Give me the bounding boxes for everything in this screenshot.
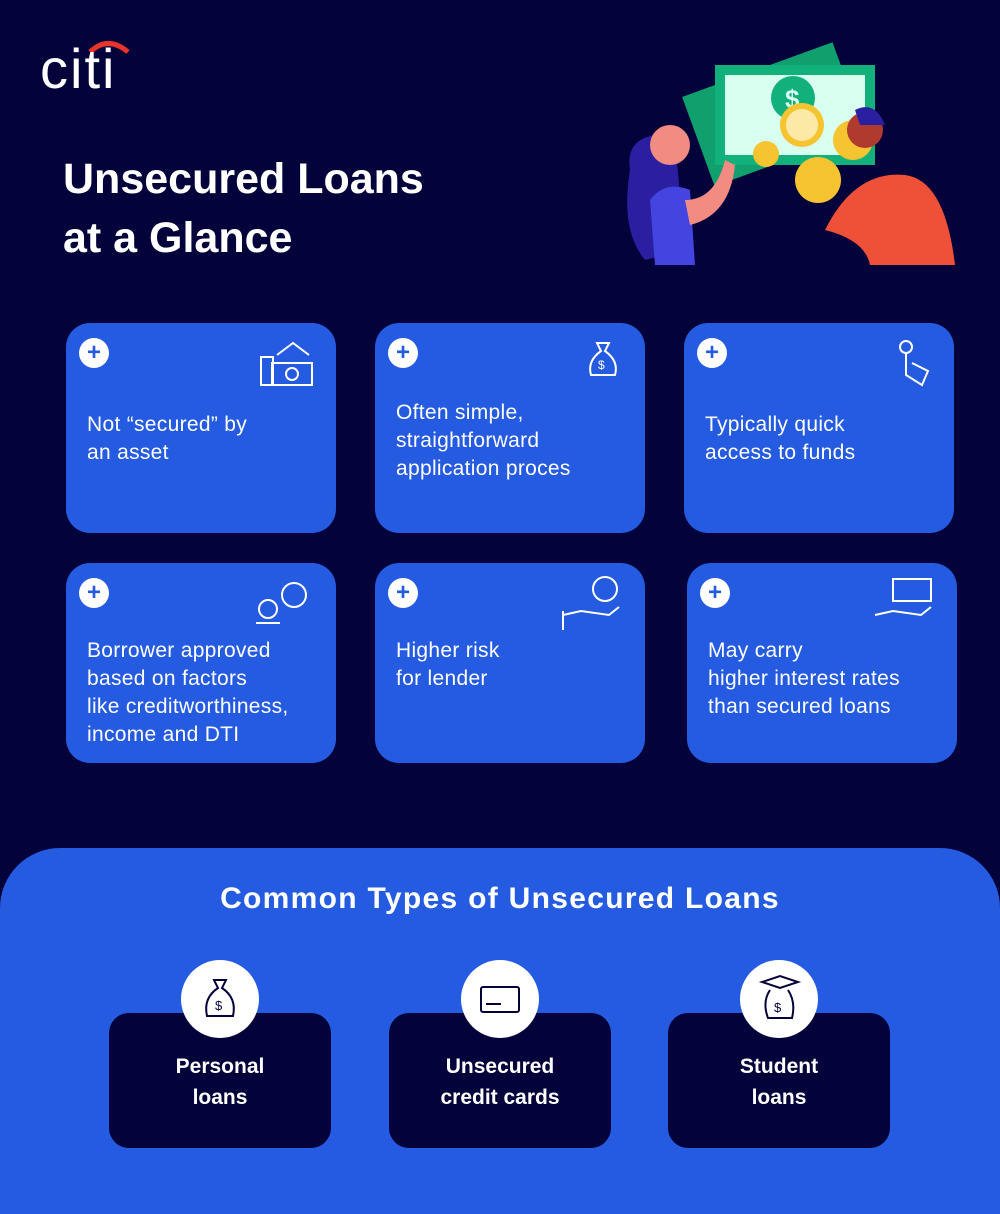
card 5: + [396, 579, 410, 606]
card 6: + [708, 579, 722, 606]
icon: money bag [589, 342, 617, 376]
card 1: + [87, 339, 101, 366]
type: personal loans [109, 1013, 331, 1148]
card 2: application proces [396, 457, 571, 480]
icon: bag: $ [215, 998, 223, 1013]
card 3 [684, 323, 954, 533]
card 3: access to funds [705, 441, 855, 464]
title: Unsecured Loans [63, 155, 424, 203]
type: personal loans: Personal [176, 1055, 264, 1078]
icon: house money [260, 342, 313, 386]
card 5 [375, 563, 645, 763]
card 4 [66, 563, 336, 763]
icon: hand cash [874, 578, 932, 616]
card 6: higher interest rates [708, 667, 900, 690]
icon: person coin [256, 582, 307, 624]
type: personal loans: loans [193, 1086, 247, 1109]
card 2: + [396, 339, 410, 366]
title: at a Glance [63, 214, 292, 262]
card 2: Often simple, [396, 401, 524, 424]
icon: bag [181, 960, 259, 1038]
card 4: income and DTI [87, 723, 239, 746]
bottom panel: common types [0, 848, 1000, 1214]
card 4: + [87, 579, 101, 606]
type: student loans [668, 1013, 890, 1148]
card 3: Typically quick [705, 413, 845, 436]
card 4: Borrower approved [87, 639, 271, 662]
card 2: straightforward [396, 429, 539, 452]
card 6: May carry [708, 639, 803, 662]
card 5: Higher risk [396, 639, 500, 662]
card 4: based on factors [87, 667, 247, 690]
card 2 [375, 323, 645, 533]
icon: money bag: $ [598, 358, 605, 372]
type: credit cards: Unsecured [446, 1055, 554, 1078]
heading: Common Types of Unsecured Loans [220, 882, 780, 915]
icon: hand tap [899, 340, 930, 386]
type: student loans: Student [740, 1055, 818, 1078]
illustration: people with money: $ [785, 84, 800, 114]
card 1: Not “secured” by [87, 413, 247, 436]
card 5: for lender [396, 667, 488, 690]
card 3: + [705, 339, 719, 366]
icon: grad bag [740, 960, 818, 1038]
card 4: like creditworthiness, [87, 695, 289, 718]
icon: grad bag: $ [774, 1000, 782, 1015]
type: credit cards: credit cards [440, 1086, 560, 1109]
card 6: than secured loans [708, 695, 891, 718]
card 1 [66, 323, 336, 533]
title [63, 155, 424, 262]
icon: card [461, 960, 539, 1038]
type: credit cards [389, 1013, 611, 1148]
logo: citi [40, 37, 116, 100]
card 1: an asset [87, 441, 169, 464]
illustration: people with money [627, 42, 955, 265]
card 6 [687, 563, 957, 763]
icon: hand percent [562, 576, 620, 630]
type: student loans: loans [752, 1086, 806, 1109]
